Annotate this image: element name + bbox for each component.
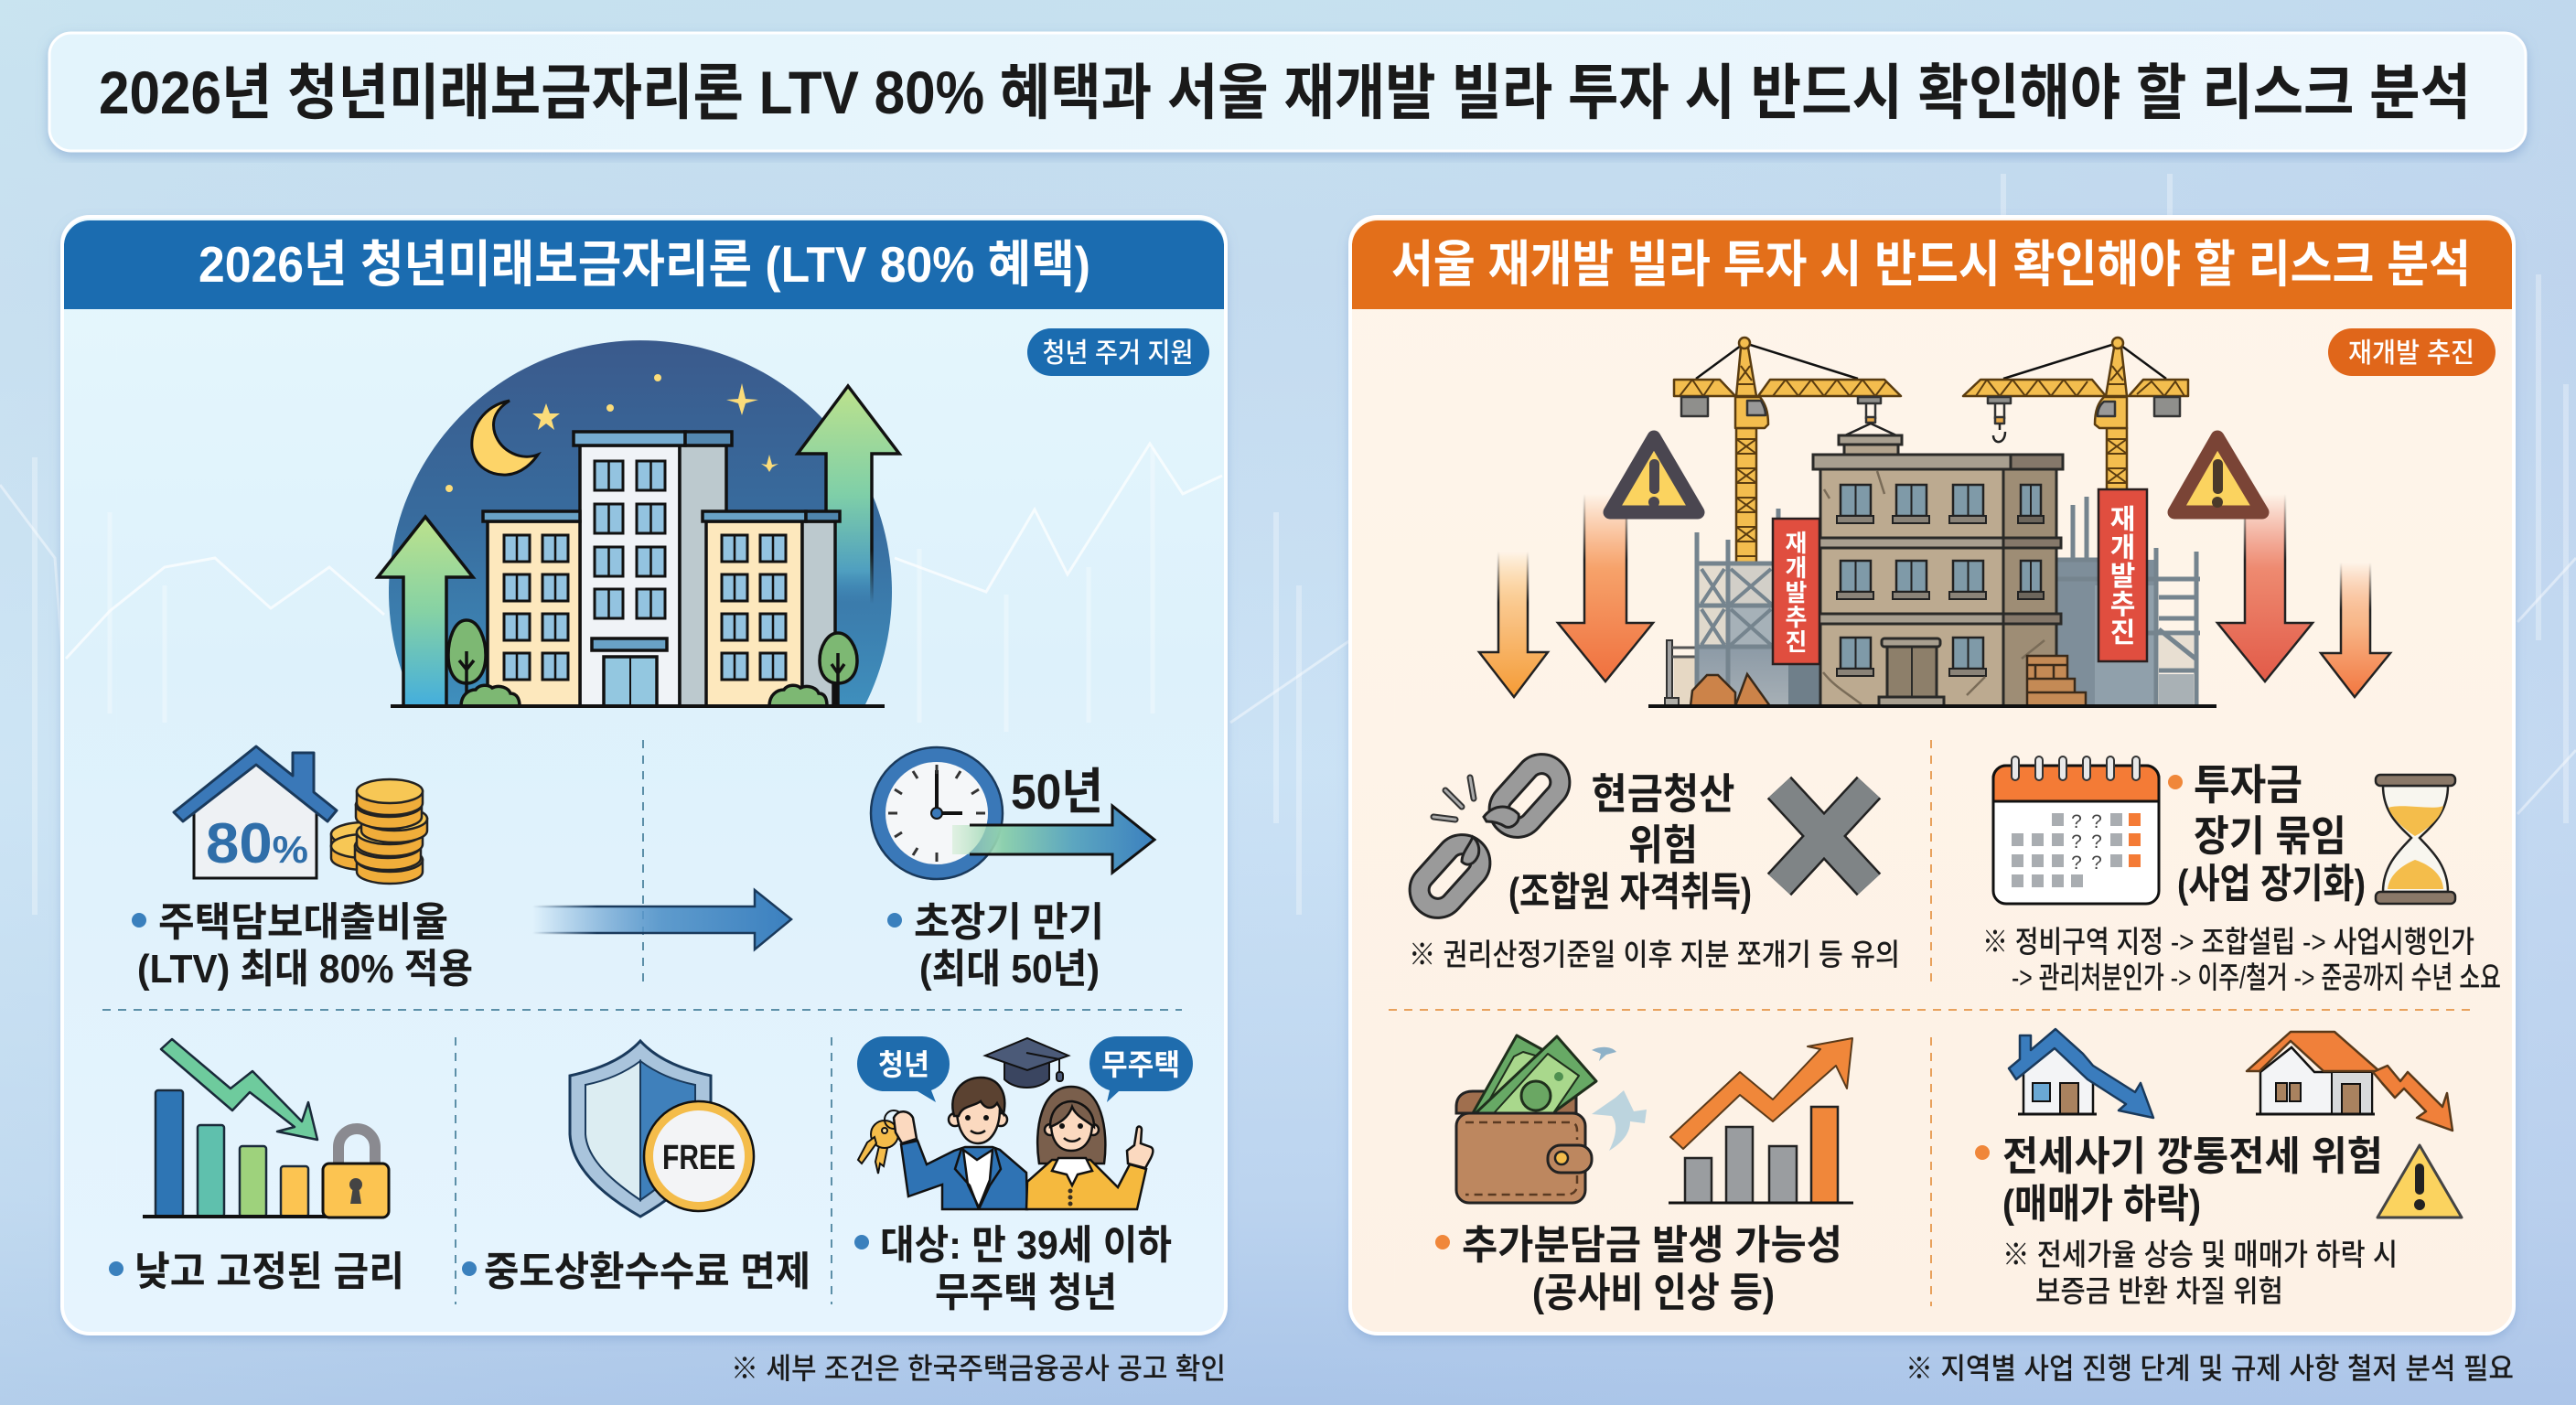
item: low fixed rate: [109, 1039, 404, 1294]
icon: house with 80% and coins: 80%: [206, 812, 308, 875]
right header text: 서울 재개발 빌라 투자 시 반드시 확인해야 할 리스크 분석: [1391, 236, 2471, 293]
icon: right crane: [1963, 338, 2188, 492]
item: long lock-in: [1982, 756, 2501, 994]
LTV bullet: [132, 913, 146, 928]
cash settlement text: (조합원 자격취득): [1508, 870, 1752, 915]
icon: hourglass: [2376, 775, 2455, 904]
50 years label: 50년: [1011, 765, 1103, 820]
bubble: no house: [1089, 1036, 1193, 1102]
left apartment building: [483, 511, 580, 706]
right scaffold: [2056, 497, 2200, 706]
icon: graduation cap: [985, 1038, 1068, 1088]
left panel background: [62, 217, 1226, 1334]
icon: right green up arrow: [798, 386, 899, 604]
item: cash settlement risk: [1409, 756, 1900, 971]
LTV text: (LTV) 최대 80% 적용: [137, 947, 473, 992]
icon: calendar: ?: [2091, 811, 2102, 832]
icon: house with orange falling arrow: [2247, 1032, 2453, 1131]
lock-in note: [1982, 925, 2501, 994]
LTV text: 주택담보대출비율: [158, 900, 448, 945]
panel: redevelopment risks: [1350, 217, 2514, 1334]
icon: young man with keys: [894, 1078, 1027, 1209]
right panel background: [1350, 217, 2514, 1334]
maturity bullet: [887, 913, 902, 928]
lock-in text: (사업 장기화): [2177, 862, 2366, 906]
banner: right: 재개발추진: [2110, 505, 2135, 649]
icon: warning triangle right: [2174, 437, 2262, 512]
item: extra contribution: [1435, 1035, 1853, 1315]
icon: house with blue falling arrow: [2009, 1029, 2153, 1118]
icon: left crane: [1674, 338, 1901, 563]
tag: youth housing support: 청년 주거 지원: [1043, 338, 1193, 369]
icon: clock: [871, 747, 1003, 879]
center apartment building: [574, 432, 732, 706]
item: 50-year maturity: [871, 747, 1154, 992]
cash settlement text: [1508, 770, 1752, 915]
icon: shield with FREE badge: FREE: [662, 1139, 735, 1177]
banner: right: [2098, 489, 2147, 661]
left header text: 2026년 청년미래보금자리론 (LTV 80% 혜택): [199, 236, 1090, 293]
eligibility text: [880, 1223, 1172, 1315]
banner: left: [1773, 519, 1819, 664]
icon: crescent moon: [472, 401, 538, 475]
lock-in text: 장기 묶임: [2194, 812, 2346, 860]
eligibility text: 무주택 청년: [935, 1271, 1117, 1315]
icon: long-term arrow: [952, 806, 1154, 873]
icons: falling red arrows: [1479, 494, 2390, 697]
panel: youth loan benefits: [62, 217, 1226, 1334]
lock-in bullet: [2168, 775, 2183, 789]
icon: bars, falling arrow and lock: [143, 1039, 389, 1217]
lock-in text: 투자금: [2194, 761, 2302, 809]
left panel header: [64, 220, 1224, 309]
tag: youth housing support: [1027, 328, 1209, 376]
bubble: youth: [857, 1036, 950, 1102]
banner: left: 재개발추진: [1786, 530, 1808, 656]
icon: warning triangle small: [2377, 1145, 2462, 1217]
footnote: right: ※ 지역별 사업 진행 단계 및 규제 사항 철저 분석 필요: [1905, 1352, 2514, 1385]
illustration: apartment at night with rising arrows: [378, 340, 899, 706]
lock-in text: [2177, 761, 2366, 906]
item: prepayment fee waived: [462, 1041, 810, 1294]
arrow: LTV to maturity: [532, 890, 791, 949]
item: jeonse fraud: [1975, 1029, 2462, 1308]
jeonse text: [2002, 1134, 2383, 1227]
LTV text: [137, 900, 473, 992]
cash settlement text: 위험: [1628, 821, 1698, 869]
jeonse note: [2002, 1238, 2398, 1308]
icon: warning triangle left: [1610, 437, 1698, 512]
maturity text: (최대 50년): [919, 947, 1100, 992]
right apartment building: [703, 511, 840, 706]
right panel header: [1352, 220, 2512, 309]
cash settlement note: ※ 권리산정기준일 이후 지분 쪼개기 등 유의: [1409, 938, 1900, 971]
item: LTV 80%: [132, 746, 473, 992]
prepayment text: 중도상환수수료 면제: [484, 1249, 810, 1294]
eligibility text: 대상: 만 39세 이하: [880, 1223, 1172, 1268]
icon: calendar: ?: [2071, 811, 2082, 832]
icon: left green up arrow: [378, 517, 473, 706]
extra contribution text: 추가분담금 발생 가능성: [1462, 1223, 1842, 1268]
left scaffold: [1665, 509, 1820, 706]
icon: X mark: [1779, 788, 1869, 885]
rate bullet: [109, 1261, 123, 1276]
title banner: [49, 33, 2526, 151]
lock-in note: ※ 정비구역 지정 -> 조합설립 -> 사업시행인가: [1982, 925, 2474, 959]
icon: young woman pointing up: [1026, 1087, 1153, 1209]
eligibility bullet: [854, 1235, 869, 1249]
extra contribution text: [1462, 1223, 1842, 1315]
illustration: redevelopment site with warnings: [1479, 338, 2390, 706]
old villa building: [1813, 435, 2063, 706]
bubble: youth: 청년: [878, 1048, 929, 1081]
icon: calendar: [1993, 756, 2159, 904]
cash settlement text: 현금청산: [1592, 770, 1734, 818]
jeonse text: 전세사기 깡통전세 위험: [2002, 1134, 2383, 1179]
maturity text: [914, 900, 1104, 992]
icons: stars: [445, 374, 778, 492]
extra contribution bullet: [1435, 1235, 1450, 1249]
icon: keys: [858, 1110, 903, 1174]
icon: calendar: ?: [2091, 853, 2102, 874]
prepayment bullet: [462, 1261, 477, 1276]
icon: rising cost chart: [1669, 1038, 1853, 1203]
trees and shrubs: [448, 620, 857, 706]
crates and cones: [1690, 656, 2086, 706]
footnote: left: ※ 세부 조건은 한국주택금융공사 공고 확인: [731, 1352, 1226, 1385]
icon: shield with FREE badge: [570, 1041, 754, 1217]
jeonse bullet: [1975, 1145, 1990, 1160]
icon: house with 80% and coins: [174, 746, 427, 884]
jeonse note: ※ 전세가율 상승 및 매매가 하락 시: [2002, 1238, 2398, 1271]
icon: calendar: ?: [2091, 831, 2102, 853]
icon: calendar: ?: [2071, 853, 2082, 874]
jeonse note: 보증금 반환 차질 위험: [2035, 1274, 2283, 1308]
maturity text: 초장기 만기: [914, 900, 1104, 945]
tag: redevelopment: 재개발 추진: [2348, 338, 2474, 369]
jeonse text: (매매가 하락): [2002, 1182, 2201, 1227]
bubble: no house: 무주택: [1101, 1048, 1180, 1081]
item: eligibility: [854, 1036, 1193, 1315]
extra contribution text: (공사비 인상 등): [1532, 1271, 1775, 1315]
icon: wallet with cash: [1456, 1035, 1647, 1203]
icon: broken chain: [1411, 756, 1568, 916]
icon: calendar: ?: [2071, 831, 2082, 853]
tag: redevelopment: [2328, 328, 2496, 376]
rate text: 낮고 고정된 금리: [134, 1249, 404, 1294]
